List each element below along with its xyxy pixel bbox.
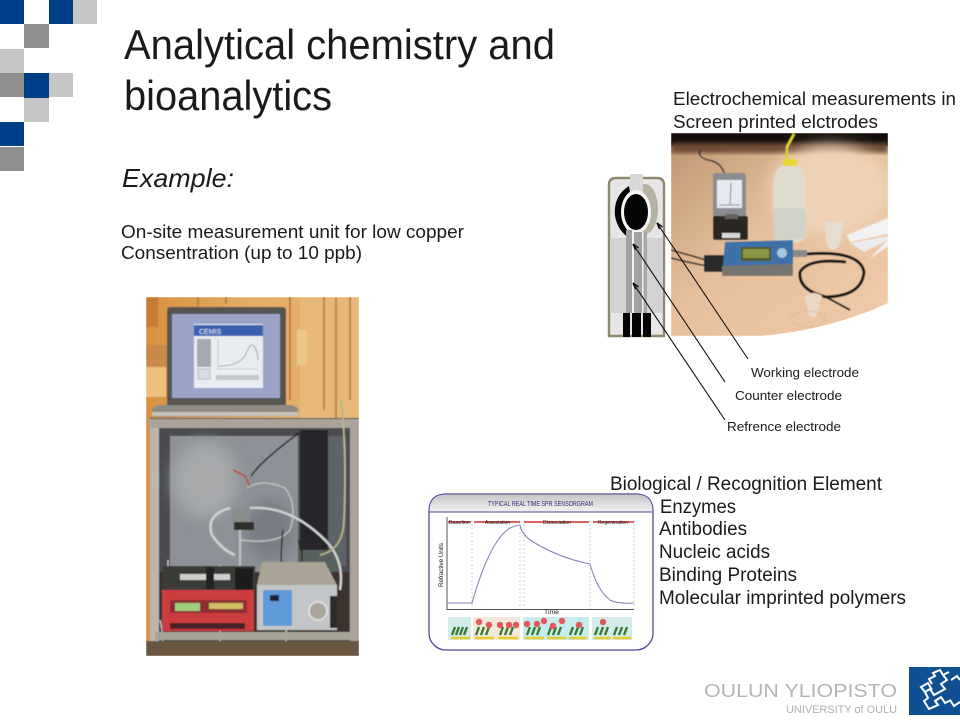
biological recognition element list bbox=[610, 473, 906, 609]
decorative square pattern bbox=[0, 0, 97, 171]
binding state illustrations bbox=[448, 617, 632, 640]
electrode labels bbox=[727, 365, 859, 434]
biological recognition element list: Binding Proteins bbox=[659, 565, 797, 586]
title bbox=[124, 21, 555, 119]
biological recognition element list: Molecular imprinted polymers bbox=[659, 588, 906, 609]
description text: Consentration (up to 10 ppb) bbox=[121, 243, 362, 263]
university wordmark bbox=[704, 680, 897, 716]
arrow: counter electrode bbox=[633, 244, 725, 382]
biological recognition element list: Biological / Recognition Element bbox=[610, 473, 883, 495]
screen printed electrode diagram bbox=[609, 174, 664, 337]
university logo bbox=[909, 667, 960, 715]
sensorgram chart: Refractive Units bbox=[438, 542, 445, 587]
sensorgram header bbox=[429, 494, 653, 512]
sensorgram header: TYPICAL REAL TIME SPR SENSORGRAM bbox=[488, 501, 593, 508]
biological recognition element list: Nucleic acids bbox=[659, 542, 770, 563]
electrode labels: Counter electrode bbox=[735, 388, 842, 403]
biological recognition element list: Antibodies bbox=[659, 519, 747, 540]
sensorgram chart: Baseline bbox=[449, 520, 470, 526]
biological recognition element list: Enzymes bbox=[660, 497, 736, 518]
title: bioanalytics bbox=[124, 72, 332, 119]
syringe pump bbox=[162, 566, 255, 631]
sensorgram chart bbox=[438, 517, 634, 616]
sensorgram chart: Dissociation bbox=[543, 520, 571, 526]
university wordmark: UNIVERSITY of OULU bbox=[786, 704, 897, 716]
example label: Example: bbox=[122, 163, 234, 193]
tubing and cell bbox=[160, 400, 345, 656]
sensorgram panel bbox=[429, 494, 653, 650]
description text bbox=[121, 222, 464, 263]
electrode labels: Refrence electrode bbox=[727, 419, 841, 434]
laptop screen bbox=[167, 307, 286, 410]
arrow: working electrode bbox=[657, 223, 748, 359]
laptop screen: CEMIS bbox=[199, 329, 222, 336]
arrow: reference electrode bbox=[633, 283, 725, 420]
sensorgram chart: Regeneration bbox=[598, 520, 628, 526]
title: Analytical chemistry and bbox=[124, 21, 555, 68]
electrochemical heading: Electrochemical measurements in bbox=[673, 88, 956, 109]
photo: on-site measurement unit bbox=[146, 297, 359, 656]
university wordmark: OULUN YLIOPISTO bbox=[704, 680, 897, 701]
cabinet bbox=[149, 418, 359, 656]
photo: portable measurement device on table bbox=[671, 133, 890, 336]
electrode labels: Working electrode bbox=[751, 365, 859, 380]
sensorgram chart: Time bbox=[544, 609, 559, 616]
peristaltic pump bbox=[257, 562, 337, 630]
description text: On-site measurement unit for low copper bbox=[121, 222, 464, 242]
electrochemical heading bbox=[673, 88, 956, 132]
electrochemical heading: Screen printed elctrodes bbox=[673, 111, 878, 132]
sensorgram chart: Association bbox=[485, 520, 510, 526]
